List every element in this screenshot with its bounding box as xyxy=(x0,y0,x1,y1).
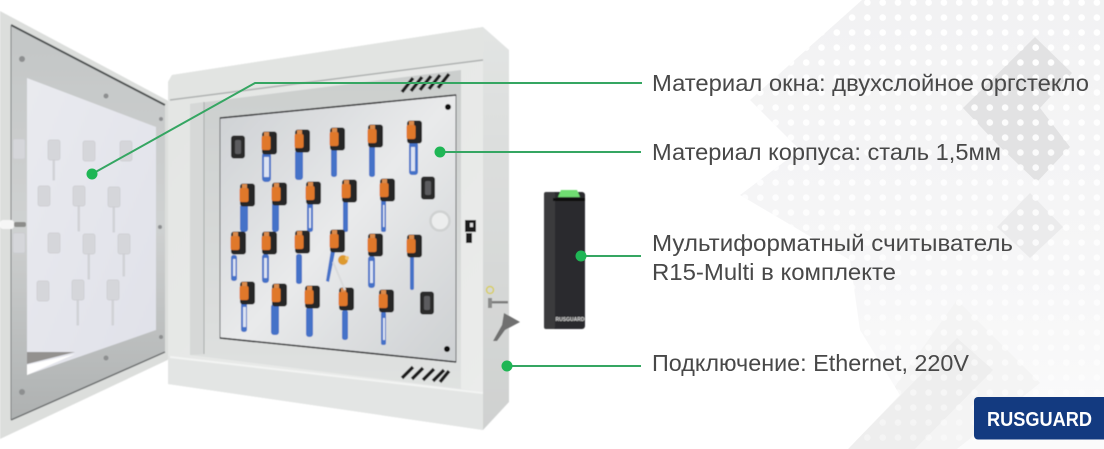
label: reader: Мультиформатный считыватель xyxy=(652,230,1013,256)
door xyxy=(0,11,176,439)
logo: RUSGUARD: RUSGUARD xyxy=(987,409,1092,431)
key tags xyxy=(231,142,418,345)
callout leader: window material xyxy=(86,83,642,180)
reader green indicator xyxy=(558,190,580,197)
cabinet side xyxy=(483,27,509,430)
callout leader: body material xyxy=(434,146,641,158)
label: window material: Материал окна: двухслойное оргстекло xyxy=(652,70,1089,96)
label: connection: Подключение: Ethernet, 220V xyxy=(652,350,970,376)
card reader xyxy=(544,190,585,329)
cabinet xyxy=(168,27,520,430)
side key and lock xyxy=(486,286,520,341)
door handle xyxy=(0,220,26,229)
key plate xyxy=(220,95,456,362)
cabinet front xyxy=(168,27,483,430)
door glass pane xyxy=(27,78,156,375)
door lock latch xyxy=(465,220,476,243)
cabinet top band xyxy=(168,27,483,100)
key slots xyxy=(230,120,435,314)
callout leader: reader xyxy=(576,250,641,262)
logo: RUSGUARD xyxy=(974,397,1104,440)
label: reader xyxy=(652,230,1013,285)
cabinet interior xyxy=(190,70,461,389)
label: body material: Материал корпуса: сталь 1,5мм xyxy=(652,139,1001,165)
door frame xyxy=(0,11,176,439)
door window recess xyxy=(11,25,165,420)
top vent xyxy=(402,74,449,92)
door screws xyxy=(19,56,163,395)
reader body xyxy=(544,192,585,329)
door reflected keys xyxy=(13,139,132,325)
reader brand label: RUSGUARD xyxy=(556,317,585,323)
gold key ring xyxy=(333,255,349,290)
cabinet bottom band xyxy=(168,356,483,430)
bottom vent xyxy=(402,367,449,382)
callout leader: connection xyxy=(502,360,641,372)
background pattern xyxy=(740,0,1104,449)
plate screws xyxy=(444,104,451,352)
label: reader: R15-Multi в комплекте xyxy=(652,259,896,285)
plate round seal xyxy=(430,212,450,230)
key tag windows xyxy=(233,147,415,340)
